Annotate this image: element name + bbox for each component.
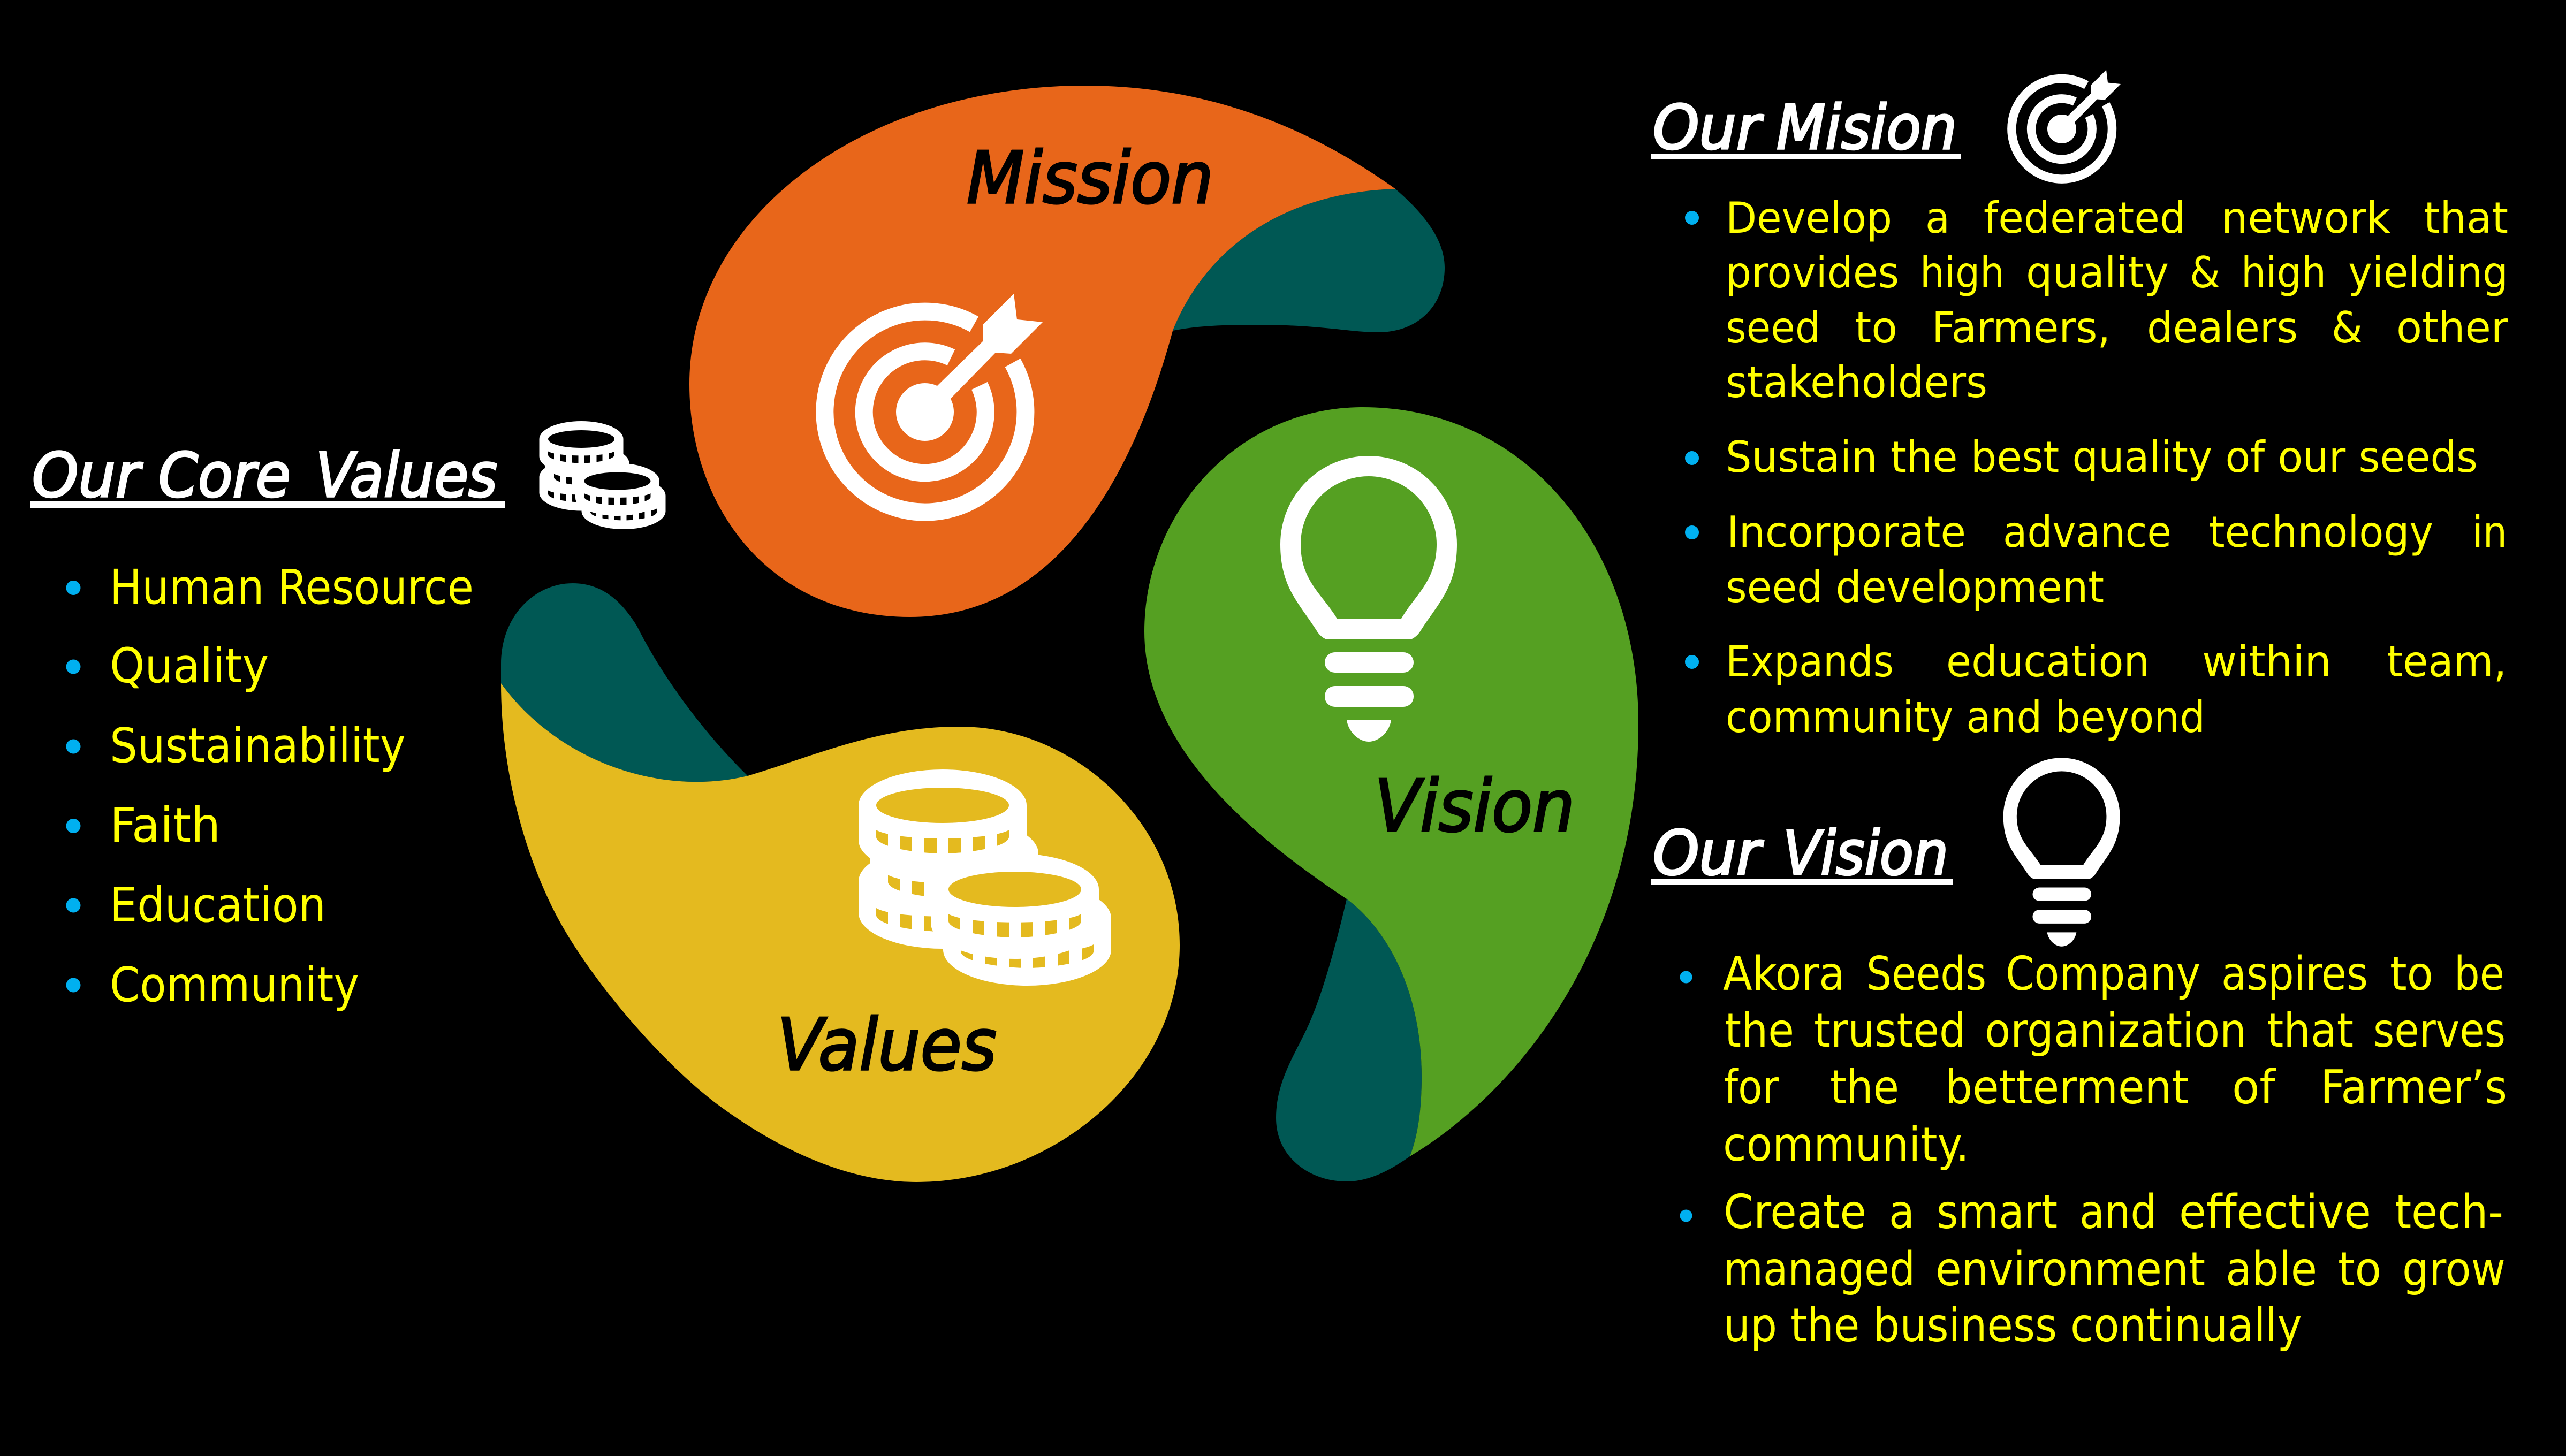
icon: coins <box>859 769 1111 986</box>
vision list: Create <box>1724 1185 1866 1239</box>
mission list: a <box>1925 193 1950 243</box>
vision list: organization <box>1985 1003 2246 1058</box>
mission list: education <box>1946 637 2150 687</box>
vision list: trusted <box>1814 1003 1966 1058</box>
mission list: other <box>2396 303 2508 353</box>
vision list: Company <box>2006 947 2200 1001</box>
mission list: quality <box>2026 248 2169 298</box>
vision list: serves <box>2373 1003 2506 1058</box>
core values list: Human Resource <box>110 559 474 615</box>
core values list: Education <box>110 877 326 933</box>
panel: mission shape <box>689 86 1445 617</box>
core values list: Community <box>110 957 359 1012</box>
vision list: up the business continually <box>1724 1298 2302 1353</box>
vision list: community. <box>1723 1117 1969 1172</box>
vision list: to <box>2390 947 2433 1001</box>
vision list: smart <box>1937 1185 2058 1239</box>
mission list: in <box>2472 507 2507 557</box>
vision list: able <box>2226 1242 2317 1297</box>
mission list: Incorporate <box>1727 507 1966 557</box>
mission list: high <box>2241 248 2326 298</box>
panel: vision shape <box>1144 407 1638 1181</box>
heading: our core values: Values <box>316 440 497 511</box>
mission list <box>1685 193 2508 742</box>
heading: our vision: Our <box>1653 818 1764 889</box>
mission list: network <box>2221 193 2390 243</box>
mission list: that <box>2424 193 2508 243</box>
heading: our core values: Our <box>32 440 143 511</box>
vision list: be <box>2454 947 2504 1001</box>
panel: values shape <box>501 583 1180 1182</box>
values yellow blob <box>501 683 1180 1182</box>
icon: target <box>825 294 1043 512</box>
vision list <box>1680 947 2507 1353</box>
vision list: and <box>2079 1185 2157 1239</box>
core values list: Quality <box>110 638 269 693</box>
mission list: federated <box>1984 193 2186 243</box>
panel: our core values <box>30 421 666 1012</box>
icon: small coins <box>540 421 666 529</box>
mission list: Expands <box>1726 637 1894 687</box>
mission list: advance <box>2003 507 2172 557</box>
vision list: tech- <box>2395 1185 2503 1239</box>
vision list: Farmer’s <box>2320 1060 2507 1115</box>
mission list: stakeholders <box>1726 357 1987 407</box>
vision list: Seeds <box>1866 947 1986 1001</box>
mission list: seed <box>1726 303 1820 353</box>
heading: our core values: Core <box>158 440 291 511</box>
vision teal tail <box>1276 899 1422 1181</box>
vision list: to <box>2338 1242 2381 1297</box>
vision list: that <box>2267 1003 2354 1058</box>
core values list: Sustainability <box>110 718 406 773</box>
vision list: effective <box>2179 1185 2371 1239</box>
vision list: environment <box>1935 1242 2205 1297</box>
vision list: aspires <box>2221 947 2368 1001</box>
core values list <box>66 559 474 1012</box>
mission list: provides <box>1726 248 1899 298</box>
mission list: Develop <box>1726 193 1892 243</box>
mission list: Farmers, <box>1932 303 2111 353</box>
icon: small target <box>2011 70 2121 179</box>
mission list: community and beyond <box>1726 692 2205 742</box>
vision list: the <box>1830 1060 1899 1115</box>
mission list: high <box>1920 248 2005 298</box>
vision green blob <box>1144 407 1638 1156</box>
vision list: grow <box>2402 1242 2506 1297</box>
heading: our mision: Our <box>1653 92 1764 163</box>
mission list: within <box>2202 637 2332 687</box>
icon: small bulb <box>2003 758 2120 947</box>
mission teal tail <box>1173 189 1445 332</box>
panel: our mission <box>1651 70 2508 742</box>
core values list: Faith <box>110 797 221 853</box>
mission orange blob <box>689 86 1395 617</box>
values teal tail <box>501 583 748 782</box>
mission list: yielding <box>2348 248 2508 298</box>
vision label: Vision <box>1375 765 1575 848</box>
mission list: dealers <box>2147 303 2298 353</box>
vision list: betterment <box>1945 1060 2189 1115</box>
heading: our mision: Mision <box>1777 92 1957 163</box>
icon: light bulb <box>1280 456 1457 742</box>
mission list: Sustain the best quality of our seeds <box>1726 432 2478 482</box>
vision list: for <box>1724 1060 1779 1115</box>
mission list: to <box>1855 303 1897 353</box>
mission label: Mission <box>967 136 1213 220</box>
mission list: & <box>2190 248 2220 298</box>
heading: our vision: Vision <box>1783 818 1948 889</box>
mission list: technology <box>2209 507 2433 557</box>
mission list: seed development <box>1726 562 2104 612</box>
vision list: the <box>1725 1003 1794 1058</box>
values label: Values <box>777 1003 997 1087</box>
vision list: of <box>2232 1060 2277 1115</box>
mission list: & <box>2332 303 2363 353</box>
vision list: Akora <box>1723 947 1845 1001</box>
mission list: team, <box>2387 637 2507 687</box>
vision list: managed <box>1724 1242 1915 1297</box>
panel: our vision <box>1651 758 2507 1353</box>
vision list: a <box>1889 1185 1915 1239</box>
